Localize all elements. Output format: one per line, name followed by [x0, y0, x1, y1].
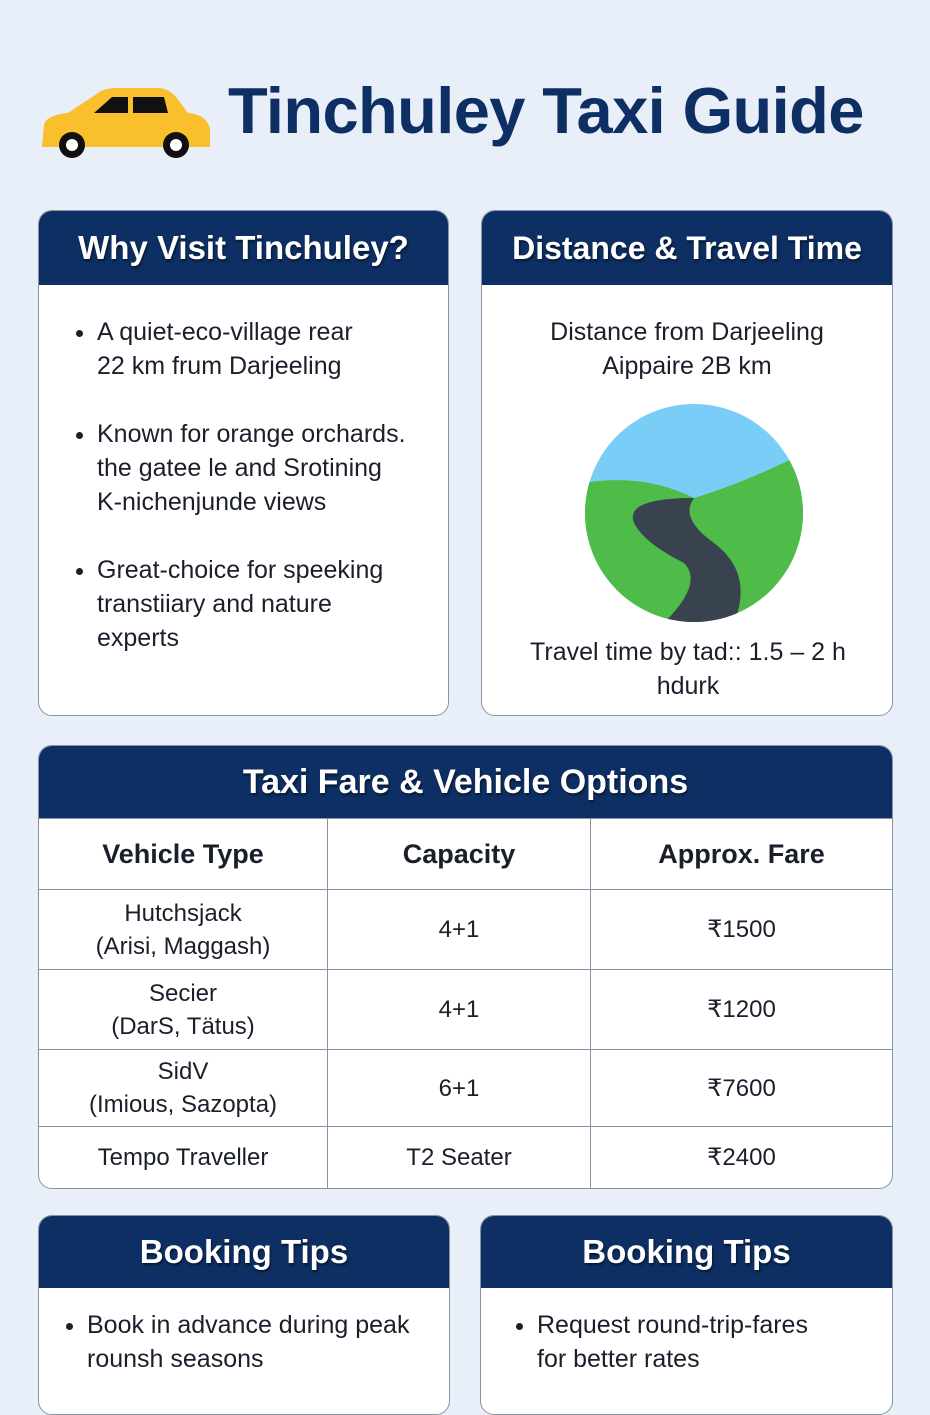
table: fares: ₹7600	[707, 1074, 776, 1102]
table: fares: SidV	[158, 1058, 208, 1085]
text: tip 1: Book in advance during peak rounsh seasons	[87, 1311, 409, 1373]
heading: booking tips 2	[481, 1216, 892, 1288]
table: fares: Capacity	[403, 838, 515, 868]
text: tip 2	[516, 1311, 808, 1373]
heading: booking tips: Booking Tips	[140, 1233, 348, 1270]
table: fares: ₹1200	[707, 996, 776, 1023]
table: fares: 4+1	[439, 996, 479, 1023]
heading: why visit: Why Visit Tinchuley?	[78, 229, 409, 266]
text: travel time	[530, 638, 846, 700]
table: fares: 6+1	[439, 1074, 479, 1102]
text: distance	[550, 318, 824, 380]
heading: distance: Distance & Travel Time	[512, 230, 862, 266]
text: travel time: Travel time by tad:: 1.5 – 2 h	[530, 638, 846, 666]
panel: booking tips right	[480, 1215, 893, 1415]
title: Tinchuley Taxi Guide	[228, 74, 864, 147]
panel: taxi fare table	[38, 745, 893, 1189]
text: why visit bullets	[76, 318, 406, 652]
text: why visit bullets: Known for orange orchards.	[97, 420, 406, 448]
table: fares: ₹1500	[707, 916, 776, 943]
text: tip 2: Request round-trip-fares	[537, 1311, 808, 1339]
text: why visit bullets: K-nichenjunde views	[97, 488, 326, 516]
text: why visit bullets: Great-choice for speeking	[97, 556, 383, 584]
heading: why visit	[39, 211, 448, 285]
table: fares: 4+1	[439, 916, 479, 943]
text: tip 2: for better rates	[537, 1345, 700, 1373]
table: fares: T2 Seater	[406, 1144, 512, 1171]
text: distance: Distance from Darjeeling	[550, 318, 824, 346]
text: why visit bullets: experts	[97, 624, 179, 652]
icon: taxi car	[42, 88, 210, 158]
table: fares: ₹2400	[707, 1144, 776, 1171]
text: why visit bullets: transtiiary and nature	[97, 590, 332, 618]
heading: fares	[39, 746, 892, 818]
text: travel time: hdurk	[657, 672, 719, 700]
table: fares: Approx. Fare	[658, 838, 825, 868]
text: distance: Aippaire 2B km	[602, 352, 772, 380]
text: why visit bullets: 22 km frum Darjeeling	[97, 352, 342, 380]
icon: road landscape	[585, 404, 803, 622]
panel: distance	[481, 210, 893, 716]
heading: distance	[482, 211, 892, 285]
panel: why visit	[38, 210, 449, 716]
panel: booking tips left	[38, 1215, 450, 1415]
table: fares: Secier	[149, 980, 217, 1006]
heading: booking tips 2: Booking Tips	[582, 1233, 791, 1270]
table: fares: (Imious, Sazopta)	[89, 1091, 277, 1118]
table: fares	[39, 818, 892, 1188]
text: why visit bullets: the gatee le and Srotining	[97, 454, 382, 482]
table: fares: (Arisi, Maggash)	[96, 932, 270, 960]
text: why visit bullets: A quiet-eco-village rear	[97, 318, 353, 346]
heading: fares: Taxi Fare & Vehicle Options	[243, 762, 688, 800]
table: fares: (DarS, Tätus)	[111, 1012, 255, 1040]
heading: booking tips	[39, 1216, 449, 1288]
table: fares: Tempo Traveller	[98, 1144, 268, 1171]
table: fares: Vehicle Type	[102, 838, 264, 868]
table: fares: Hutchsjack	[124, 900, 242, 926]
